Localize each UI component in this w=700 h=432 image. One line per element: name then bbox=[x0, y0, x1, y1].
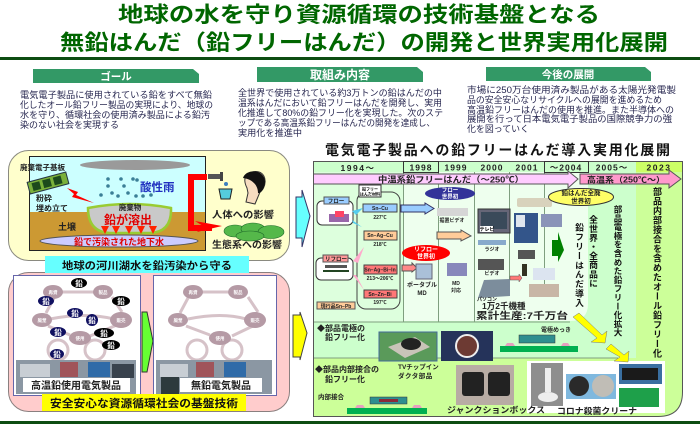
arrow: dark green bbox=[552, 232, 564, 262]
polluted groundwater: 鉛で汚染された地下水 bbox=[74, 236, 164, 247]
heading: approach bbox=[257, 67, 423, 82]
arrow: yellow diagonal 1 bbox=[573, 313, 607, 343]
product: TV bbox=[478, 209, 510, 233]
solder materials column: Sn−Cu bbox=[372, 206, 388, 212]
row: electrode lead-free: 鉛フリー化 bbox=[325, 332, 365, 342]
text block: approach: 全世界で使用されている約3万トンの鉛はんだの中 bbox=[238, 87, 442, 98]
text block: future: 化を図っていく bbox=[467, 124, 529, 134]
vertical text: lead-free solder adoption: 鉛フリーはんだ導入 bbox=[574, 222, 584, 308]
row: internal junction lead-free bbox=[315, 361, 665, 416]
arrow: mid-temp solder band: 中温系鉛フリーはんだ（～250℃） bbox=[378, 174, 524, 184]
row: electrode lead-free: ダクタ部品 bbox=[398, 371, 433, 380]
total count text: 1万2千機種 bbox=[482, 301, 526, 311]
product: TV: テレビ bbox=[479, 226, 495, 233]
label: lead-free products: 無鉛電気製品 bbox=[191, 379, 251, 392]
vertical text: electrode expansion: 部品電極を含めた鉛フリー化拡大 bbox=[613, 204, 623, 338]
arrow: small salmon bbox=[510, 274, 522, 282]
title: 地球の水を守り資源循環の技術基盤となる bbox=[118, 3, 600, 27]
arrow: high-temp solder band bbox=[580, 170, 681, 188]
heading: goal: ゴール bbox=[100, 70, 132, 83]
panel: lead-free cycle comparison bbox=[8, 272, 290, 412]
icon: acid cloud bbox=[80, 160, 190, 170]
row: internal junction lead-free: ◆部品内部接合の bbox=[315, 364, 379, 374]
vertical text: all products: 全世界・全商品に bbox=[588, 214, 598, 288]
cycle diagram: with lead: 鉛 bbox=[117, 296, 125, 306]
product: camcorder and laptop: ラジオ bbox=[485, 246, 499, 253]
cycle diagram: with lead: 鉛 bbox=[42, 296, 50, 306]
product: MP3: MD bbox=[452, 281, 460, 287]
solder materials column: Sn−Ag−Bi−In bbox=[364, 268, 396, 274]
cycle diagram: with lead: 製品 bbox=[98, 289, 108, 296]
solder materials column: Sn−Ag−Cu bbox=[367, 233, 393, 239]
label: current Sn-Pb bbox=[317, 302, 355, 310]
title bbox=[60, 3, 668, 55]
panel: lead pollution mechanism: 粉砕 bbox=[36, 193, 52, 203]
cycle diagram: with lead: 再資 bbox=[48, 289, 58, 296]
solder materials column: はんだ材料 bbox=[360, 190, 380, 196]
row: internal junction lead-free: 内部接合 bbox=[318, 392, 344, 401]
banner: protect rivers: 地球の河川湖水を鉛汚染から守る bbox=[62, 259, 232, 272]
photo: chip x-ray bbox=[441, 331, 493, 361]
product: camcorder and laptop: パソコン bbox=[477, 296, 497, 303]
cycle diagram: lead-free: 再資 bbox=[188, 289, 198, 296]
product: fridge, aircon, printer, phone, fax bbox=[514, 198, 562, 297]
cycle diagram: lead-free: 廃棄 bbox=[174, 317, 183, 324]
lead phase-out ellipse bbox=[548, 188, 614, 206]
text block: approach: 化推進して80%の鉛フリー化を実現した。次のステ bbox=[238, 107, 443, 118]
schematic: internal junction bbox=[347, 397, 427, 414]
row: electrode lead-free bbox=[317, 323, 578, 380]
polluted groundwater bbox=[40, 235, 198, 247]
cycle diagram: with lead: 鉛 bbox=[71, 308, 79, 318]
landfill cross-section: 廃棄物 bbox=[119, 202, 142, 212]
photo: corona cleaner panel bbox=[527, 361, 665, 416]
reflow world first bbox=[402, 245, 450, 261]
panel: goal bbox=[20, 69, 213, 130]
reflow world first: 世界初 bbox=[417, 252, 435, 260]
year header: ～2004 bbox=[550, 162, 582, 172]
text block: goal: 電気電子製品に使用されている鉛をすべて無鉛 bbox=[20, 89, 212, 100]
landfill cross-section: 土壌 bbox=[58, 221, 76, 232]
heading: approach: 取組み内容 bbox=[310, 67, 370, 82]
text block: approach: 温系はんだにおいて鉛フリーはんだを開発し、実用 bbox=[238, 97, 442, 108]
reflow world first: リフロー bbox=[414, 246, 438, 254]
text block: approach: ップである高温系鉛フリーはんだの開発を達成し、 bbox=[238, 117, 435, 128]
product: camcorder and laptop: ビデオ bbox=[484, 270, 500, 277]
schematic: electrode plating bbox=[500, 335, 578, 352]
heading: goal bbox=[33, 69, 199, 83]
waste mound bbox=[88, 204, 171, 233]
text block: goal bbox=[20, 89, 213, 130]
product: video deck: 据置ビデオ bbox=[439, 217, 465, 224]
arrow: orange bbox=[437, 230, 471, 241]
solder materials column: 227℃ bbox=[373, 215, 387, 221]
arrow: mid-temp solder band bbox=[314, 171, 578, 188]
product: portable MD: ポータブル bbox=[407, 281, 437, 289]
landfill cross-section: 鉛が溶出 bbox=[104, 212, 152, 227]
text block: future: 市場に250万台使用済み製品がある太陽光発電製 bbox=[467, 84, 676, 95]
row: electrode lead-free: TVチップイン bbox=[398, 363, 439, 371]
cycle diagram: with lead: 鉛 bbox=[100, 328, 108, 338]
photo: junction box bbox=[456, 365, 514, 405]
icon: human head bbox=[243, 171, 265, 204]
product: portable MD: MD bbox=[417, 291, 427, 297]
product: camcorder and laptop bbox=[477, 240, 510, 303]
icon: circuit board bbox=[27, 172, 69, 194]
cycle diagram: with lead: 使用 bbox=[76, 335, 85, 342]
label: acid rain: 酸性雨 bbox=[140, 180, 174, 194]
cycle diagram: with lead: 鉛 bbox=[75, 278, 83, 288]
flow world first: フロー bbox=[442, 187, 458, 194]
year header: 1994～ bbox=[341, 163, 375, 173]
year header: 2023 bbox=[647, 162, 671, 172]
heading: future: 今後の展開 bbox=[542, 68, 594, 81]
arrow: green bbox=[142, 312, 153, 372]
panel: lead pollution mechanism: 廃棄電子基板 bbox=[20, 162, 65, 172]
product: portable MD bbox=[407, 264, 437, 297]
label: current Sn-Pb: 現行品Sn−Pb bbox=[321, 303, 351, 310]
solder materials column: 197℃ bbox=[373, 300, 387, 306]
lead badges bbox=[38, 278, 130, 359]
banner: recycling society: 安全安心な資源循環社会の基盤技術 bbox=[50, 396, 238, 410]
flow process bbox=[317, 197, 353, 225]
total count text bbox=[476, 301, 569, 322]
vertical text: all lead-free: 部品内部接合を含めたオール鉛フリー化 bbox=[652, 186, 662, 358]
cycle diagram: lead-free: 製品 bbox=[234, 289, 243, 296]
panel: lead pollution mechanism: 生態系への影響 bbox=[212, 239, 283, 251]
cycle diagram: with lead: 鉛 bbox=[53, 349, 61, 359]
cycle diagram: with lead: 廃棄 bbox=[38, 317, 47, 324]
cycle diagram: with lead: 鉛 bbox=[107, 340, 115, 350]
year header bbox=[314, 162, 682, 173]
panel: lead pollution mechanism: 埋め立て bbox=[36, 203, 68, 213]
solder materials column: 213～206℃ bbox=[367, 276, 393, 282]
total count text: 累計生産:7千万台 bbox=[476, 310, 569, 322]
solder materials column: 218℃ bbox=[373, 242, 387, 248]
year header: 2000 bbox=[481, 162, 503, 172]
heading: deployment: 電気電子製品への鉛フリーはんだ導入実用化展開 bbox=[325, 142, 670, 158]
panel: lead pollution mechanism bbox=[8, 150, 290, 260]
landfill cross-section bbox=[30, 156, 206, 250]
row: electrode lead-free: 電極めっき bbox=[541, 326, 571, 334]
solder materials column: 鉛フリー bbox=[362, 186, 378, 192]
solder materials column bbox=[357, 185, 400, 309]
solder materials column: Sn−Zn−Bi bbox=[368, 292, 392, 298]
panel: lead pollution mechanism: 人体への影響 bbox=[212, 209, 275, 221]
photo: coil on PCB bbox=[379, 332, 437, 361]
year header: 1998 bbox=[410, 162, 432, 172]
leaching arrows bbox=[101, 226, 157, 234]
row: internal junction lead-free: 鉛フリー化 bbox=[325, 374, 365, 384]
cycle diagram: with lead: 鉛 bbox=[54, 327, 62, 337]
panel: future bbox=[467, 67, 676, 134]
product: video deck bbox=[437, 208, 468, 224]
text block: future: 展開を行って日本電気電子製品の国際競争力の強 bbox=[467, 113, 672, 124]
lead phase-out ellipse: 鉛はんだ全廃 bbox=[562, 188, 601, 197]
text block: future bbox=[467, 84, 676, 134]
arrow: red pipe to human and ecosystem bbox=[191, 177, 212, 228]
arrow: high-temp solder band: 高温系（250℃～） bbox=[587, 174, 665, 184]
product: MP3 bbox=[447, 263, 467, 294]
text block: future: 高温鉛フリーはんだの使用を推進。また半導体への bbox=[467, 104, 674, 115]
arrow: small pink bbox=[402, 263, 417, 272]
cycle diagram: with lead: 販売 bbox=[116, 317, 126, 324]
arrow: yellow diagonal 2 bbox=[606, 344, 629, 362]
photo: corona cleaner panel: コロナ殺菌クリーナ bbox=[557, 406, 637, 416]
row: electrode lead-free: ◆部品電極の bbox=[317, 323, 365, 333]
flow world first bbox=[425, 187, 475, 200]
arrow: landfill bolt bbox=[67, 188, 94, 203]
banner: recycling society bbox=[42, 394, 246, 411]
label: leaded products: 高温鉛使用電気製品 bbox=[31, 379, 121, 392]
cycle diagram: lead-free: 販売 bbox=[250, 317, 260, 324]
acid rain drops bbox=[99, 177, 153, 198]
product: MP3: 対応 bbox=[451, 287, 461, 294]
flow world first: 世界初 bbox=[442, 192, 459, 200]
panel: approach bbox=[238, 67, 443, 138]
text block: goal: 染のない社会を実現する bbox=[20, 119, 119, 130]
text block: goal: 化したオール鉛フリー製品の実現により、地球の bbox=[20, 99, 213, 110]
cycle diagram: with lead bbox=[14, 276, 140, 396]
arrow: cyan bbox=[296, 190, 310, 247]
photo band bbox=[156, 360, 272, 394]
photo band bbox=[16, 360, 136, 394]
cycle diagram: lead-free: 使用 bbox=[216, 335, 225, 342]
year header: 2005～ bbox=[596, 162, 628, 172]
cycle diagram: lead-free bbox=[154, 276, 276, 396]
connector wedges bbox=[352, 208, 364, 290]
year header: 2001 bbox=[516, 162, 538, 172]
text block: approach bbox=[238, 87, 443, 138]
title: 無鉛はんだ（鉛フリーはんだ）の開発と世界実用化展開 bbox=[60, 31, 668, 55]
label: junction box: ジャンクションボックス bbox=[447, 405, 545, 415]
text block: future: 品の安全安心なリサイクルへの展開を進めるため bbox=[467, 94, 662, 105]
text block: goal: 水を守り、循環社会の使用済み製品による鉛汚 bbox=[20, 109, 210, 120]
lead phase-out ellipse: 世界初 bbox=[571, 196, 591, 205]
year header: 1999 bbox=[445, 162, 467, 172]
reflow process: リフロー bbox=[325, 256, 347, 263]
panel: deployment timeline bbox=[314, 162, 682, 416]
icon: vegetation bbox=[224, 223, 284, 241]
banner: protect rivers bbox=[45, 256, 249, 273]
reflow process bbox=[316, 255, 353, 280]
arrow: yellow bbox=[293, 312, 307, 360]
icon: faucet and bucket bbox=[208, 172, 232, 199]
flow process: フロー bbox=[328, 198, 344, 205]
cycle diagram: with lead: 鉛 bbox=[88, 315, 96, 325]
arrow: blue bbox=[401, 203, 434, 214]
text block: approach: 実用化を推進中 bbox=[238, 127, 302, 138]
heading: future bbox=[486, 67, 651, 81]
